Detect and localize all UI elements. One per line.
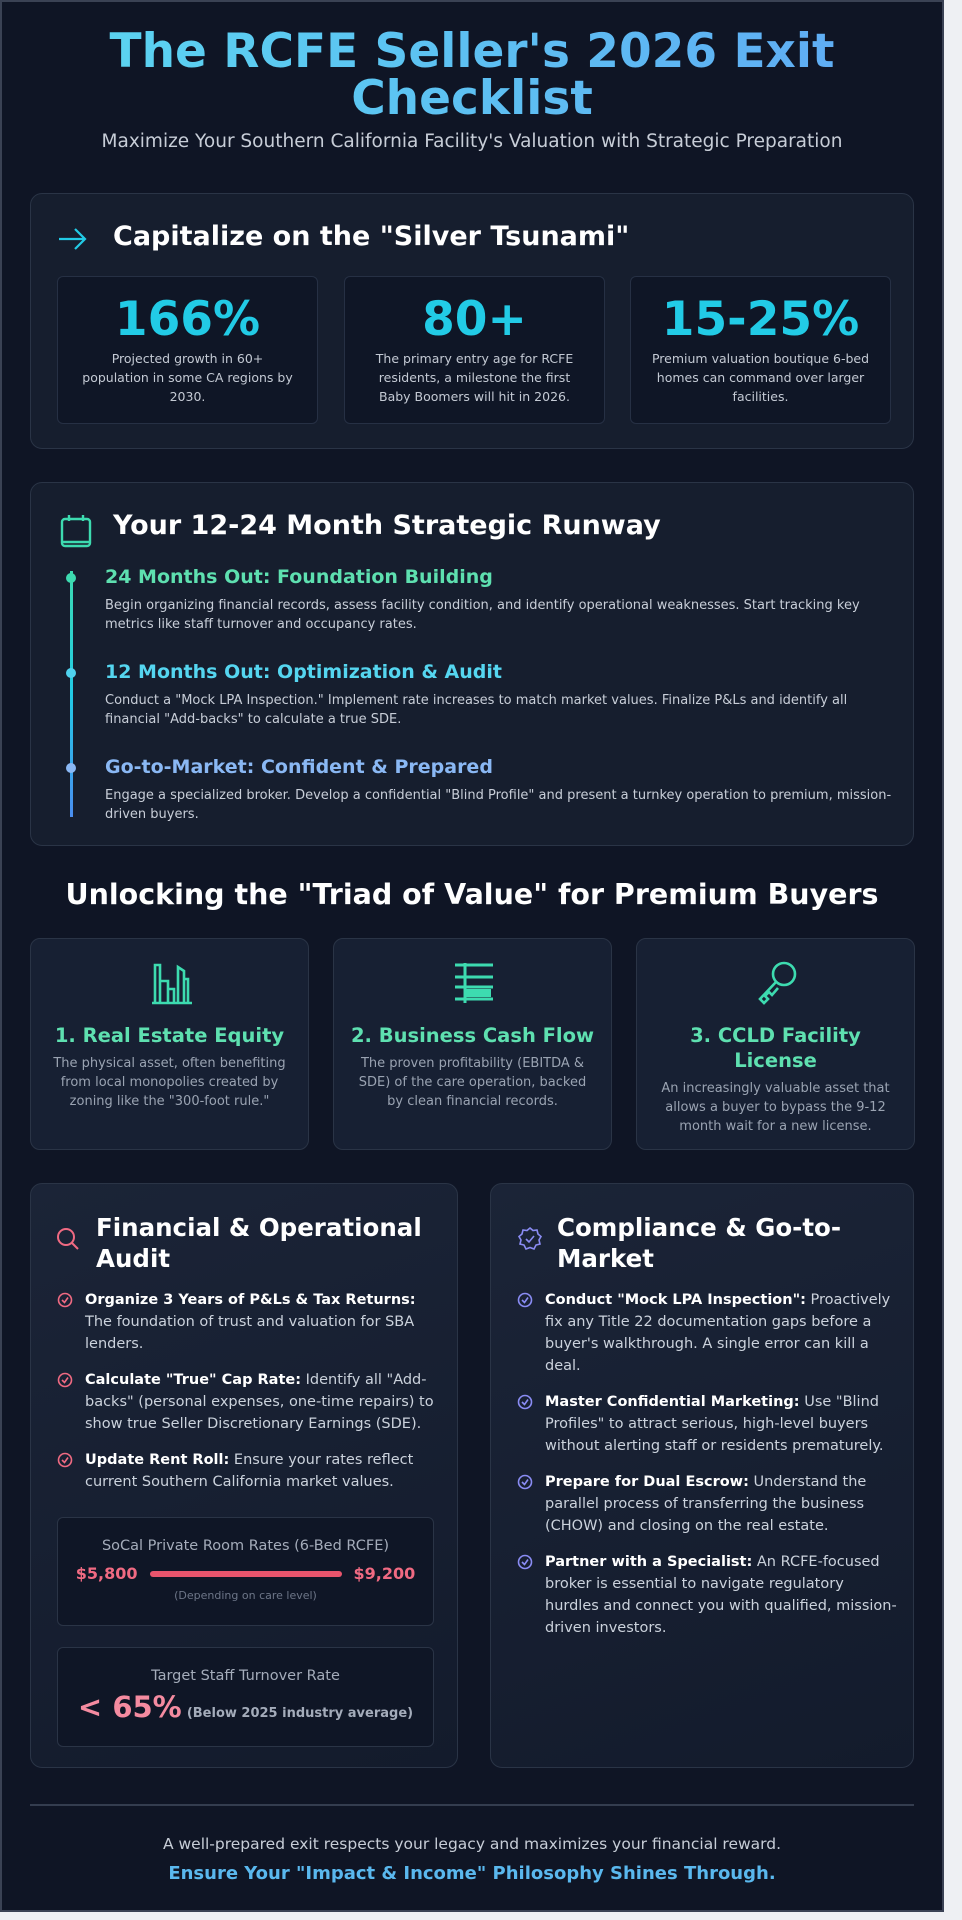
item: broker is essential to navigate regulatory — [545, 1576, 844, 1592]
stat: 80+ — [344, 276, 605, 424]
item — [518, 1474, 866, 1534]
heading: Compliance & Go-to- — [557, 1213, 841, 1242]
item: Organize 3 Years of P&Ls & Tax Returns: The foundation of trust and valuation for SBA lenders. — [85, 1292, 416, 1352]
item: Prepare for Dual Escrow: Understand the — [545, 1474, 866, 1490]
stat: 80+: residents, a milestone the first — [379, 370, 570, 385]
checklist — [58, 1292, 434, 1490]
heading: Your 12-24 Month Strategic Runway — [113, 510, 661, 541]
card: license: 3. CCLD Facility — [690, 1024, 861, 1047]
stat: 80+: The primary entry age for RCFE — [376, 351, 573, 366]
item: fix any Title 22 documentation gaps before a — [545, 1314, 871, 1330]
heading: Financial & Operational — [96, 1213, 422, 1242]
item — [518, 1554, 897, 1636]
icon: buildings — [152, 964, 192, 1004]
item: Partner with a Specialist: An RCFE-focused — [545, 1554, 880, 1570]
item 24 months: 24 Months Out: Foundation Building — [105, 566, 493, 588]
heading: Capitalize on the "Silver Tsunami" — [113, 221, 629, 252]
card: cash flow: 2. Business Cash Flow — [351, 1024, 594, 1047]
icon: arrow — [59, 228, 86, 250]
footer text: A well-prepared exit respects your legacy and maximizes your financial reward. — [163, 1835, 781, 1853]
item: Update Rent Roll: Ensure your rates reflect current Southern California market values. — [85, 1452, 413, 1490]
checklist — [518, 1292, 897, 1636]
item 12 months: Conduct a "Mock LPA Inspection." Implement rate increases to match market values. Finalize P&Ls and identify all — [105, 693, 847, 708]
heading: triad: Unlocking the "Triad of Value" for Premium Buyers — [65, 878, 879, 911]
icon: calendar — [60, 515, 92, 548]
card: real estate: The physical asset, often benefiting from local monopolies created by zoning like the "300-foot rule." — [53, 1056, 286, 1109]
stat: 166% — [57, 276, 318, 424]
card: license: An increasingly valuable asset that allows a buyer to bypass the 9-12 month wait for a new license. — [661, 1081, 890, 1134]
title: The RCFE Seller's 2026 Exit — [110, 24, 834, 79]
item go-to-market: driven buyers. — [105, 807, 199, 822]
rate box — [57, 1517, 434, 1626]
footer tagline: Ensure Your "Impact & Income" Philosophy Shines Through. — [168, 1863, 776, 1884]
card: license: License — [734, 1049, 817, 1072]
panel: silver tsunami — [30, 193, 914, 449]
stat: 166%: 2030. — [170, 389, 205, 404]
item 24 months: metrics like staff turnover and occupancy rates. — [105, 617, 417, 632]
icon: magnifier — [57, 1228, 79, 1250]
item 24 months — [66, 566, 860, 632]
item: Profiles" to attract serious, high-level buyers — [545, 1416, 868, 1432]
title — [2, 28, 942, 122]
rate box: $9,200 — [354, 1564, 415, 1583]
item 24 months: Begin organizing financial records, assess facility condition, and identify operational weaknesses. Start tracking key — [105, 598, 860, 613]
icon: ledger — [455, 963, 493, 1003]
card: cash flow: The proven profitability (EBITDA & SDE) of the care operation, backed by clean financial records. — [359, 1056, 586, 1109]
stat: 80+: 80+ — [422, 292, 527, 347]
card: cash flow — [333, 938, 612, 1150]
title: Checklist — [351, 71, 593, 126]
stat: 80+: Baby Boomers will hit in 2026. — [379, 389, 570, 404]
item 12 months — [66, 661, 847, 727]
card: real estate — [30, 938, 309, 1150]
rate box: $5,800 — [76, 1564, 138, 1583]
panel: runway — [30, 482, 914, 846]
item — [518, 1394, 883, 1454]
item — [518, 1292, 890, 1374]
card: license — [636, 938, 915, 1150]
turnover box — [57, 1647, 434, 1747]
item: buyer's walkthrough. A single error can kill a — [545, 1336, 869, 1352]
icon: badge check — [518, 1227, 542, 1250]
heading — [557, 1213, 841, 1273]
stat: 15-25%: 15-25% — [662, 292, 859, 347]
stat: 15-25%: homes can command over larger — [657, 370, 864, 385]
heading: Market — [557, 1244, 654, 1273]
item go-to-market — [66, 756, 891, 822]
card: real estate: 1. Real Estate Equity — [55, 1024, 284, 1047]
item go-to-market: Go-to-Market: Confident & Prepared — [105, 756, 493, 778]
item: hurdles and connect you with qualified, mission- — [545, 1598, 897, 1614]
item: Conduct "Mock LPA Inspection": Proactively — [545, 1292, 890, 1308]
item: driven investors. — [545, 1620, 666, 1636]
panel: compliance — [490, 1183, 914, 1768]
stat: 15-25%: Premium valuation boutique 6-bed — [652, 351, 869, 366]
heading — [96, 1213, 422, 1273]
panel: financial audit — [30, 1183, 458, 1768]
stat: 15-25% — [630, 276, 891, 424]
item: parallel process of transferring the business — [545, 1496, 864, 1512]
heading: Audit — [96, 1244, 170, 1273]
rate box: SoCal Private Room Rates (6-Bed RCFE) — [102, 1538, 389, 1554]
item: deal. — [545, 1358, 581, 1374]
item: without alerting staff or residents prematurely. — [545, 1438, 883, 1454]
subtitle: Maximize Your Southern California Facility's Valuation with Strategic Preparation — [102, 131, 842, 152]
stat: 166%: Projected growth in 60+ — [112, 351, 263, 366]
rate box: (Depending on care level) — [174, 1589, 317, 1602]
stat: 166%: population in some CA regions by — [82, 370, 293, 385]
item: Calculate "True" Cap Rate: Identify all "Add-backs" (personal expenses, one-time repairs) to show true Seller Discretionary Earnings (SDE). — [85, 1372, 434, 1432]
item: Master Confidential Marketing: Use "Blind — [545, 1394, 879, 1410]
turnover box: Target Staff Turnover Rate — [151, 1668, 340, 1684]
item 12 months: 12 Months Out: Optimization & Audit — [105, 661, 502, 683]
item 12 months: financial "Add-backs" to calculate a true SDE. — [105, 712, 401, 727]
icon: key — [758, 962, 796, 1005]
item: (CHOW) and closing on the real estate. — [545, 1518, 828, 1534]
timeline line — [70, 571, 73, 817]
item go-to-market: Engage a specialized broker. Develop a confidential "Blind Profile" and present a turnkey operation to premium, mission- — [105, 788, 891, 803]
timeline items — [66, 566, 891, 822]
stat: 166%: 166% — [115, 292, 260, 347]
stat: 15-25%: facilities. — [733, 389, 788, 404]
turnover box: < 65% (Below 2025 industry average) — [78, 1690, 413, 1724]
